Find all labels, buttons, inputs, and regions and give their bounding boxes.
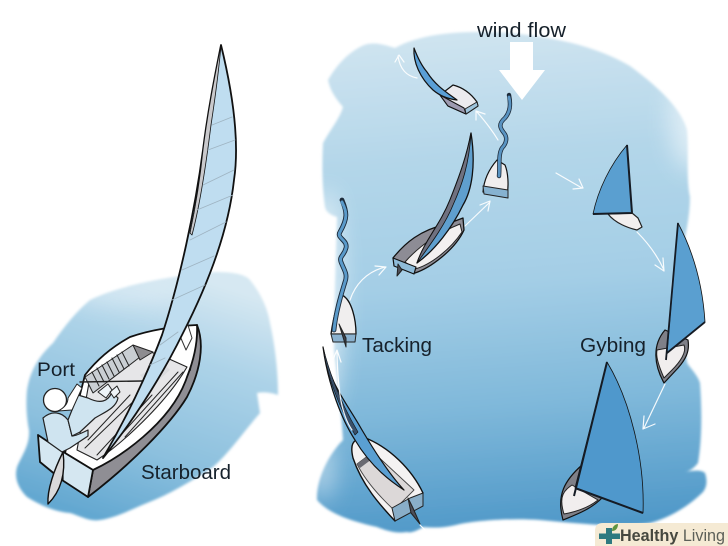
water patch: right xyxy=(312,32,714,533)
label: Tacking: Tacking xyxy=(362,335,432,357)
label: Gybing: Gybing xyxy=(580,335,646,357)
tacking boat 4: luffing top xyxy=(483,95,510,198)
logo plus icon xyxy=(599,528,620,544)
gybing boat 2 xyxy=(656,223,705,383)
water patch: left xyxy=(16,272,278,520)
logo leaf xyxy=(612,524,618,531)
wind flow label: wind flow xyxy=(476,20,567,42)
rudder xyxy=(48,452,64,504)
main sail xyxy=(103,45,236,458)
tacking boat 1: bottom xyxy=(323,347,423,524)
wind flow arrow xyxy=(499,42,545,100)
tacking boat 5: top xyxy=(414,48,478,114)
gybing boat 3 xyxy=(561,362,643,520)
logo: Healthy Living xyxy=(595,523,728,546)
main boat with sailor xyxy=(38,45,236,504)
transom xyxy=(38,435,93,497)
hull xyxy=(38,322,201,497)
sailor xyxy=(43,381,142,452)
tacking boat 3: middle xyxy=(393,133,473,276)
label: Port: Port xyxy=(37,360,76,381)
logo wordmark: Healthy Living xyxy=(620,526,725,545)
luffing sail xyxy=(334,200,346,330)
luffing sail xyxy=(499,95,510,176)
tacking boat 2: luffing left xyxy=(331,200,356,347)
white course arrows xyxy=(332,55,665,530)
gybing boat 1 xyxy=(593,145,642,230)
label: Starboard: Starboard xyxy=(141,462,231,484)
